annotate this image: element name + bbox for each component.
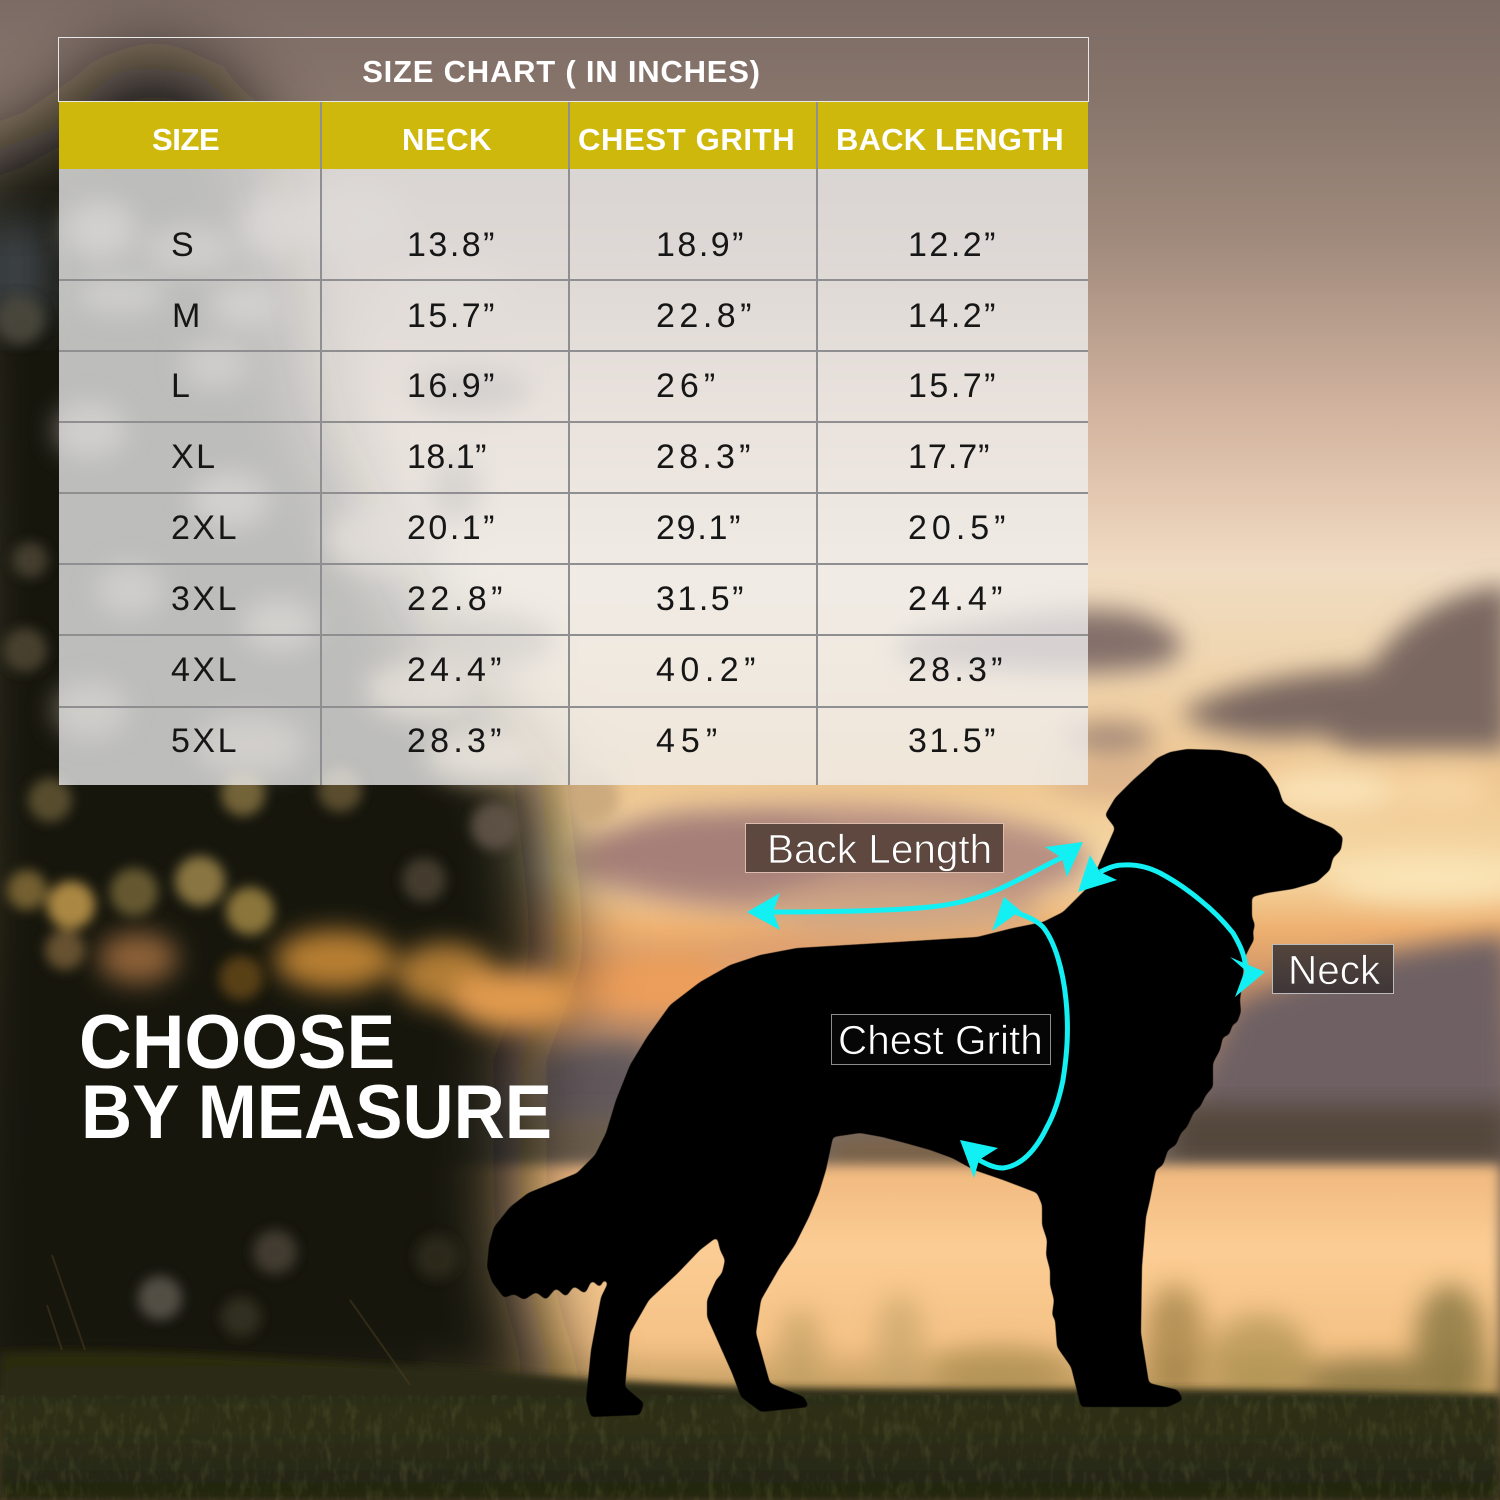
row 2XL: 20.5”: [908, 509, 1010, 547]
arrow: chest girth: [960, 897, 1067, 1178]
label: back length: Back Length: [767, 826, 992, 872]
header row: BACK LENGTH: [836, 122, 1064, 157]
row S: 18.9”: [656, 226, 746, 264]
row XL: 18.1”: [407, 438, 487, 476]
row 2XL: 20.1”: [407, 509, 497, 547]
reeds and grass: [778, 1285, 1485, 1405]
row XL: [171, 438, 990, 476]
size chart table: [58, 37, 1089, 785]
tree mass: [0, 60, 570, 1420]
label: chest girth: Chest Grith: [838, 1017, 1043, 1063]
row 4XL: 40.2”: [656, 651, 761, 689]
row M: 15.7”: [407, 297, 497, 335]
row S: S: [171, 226, 196, 264]
row L: 15.7”: [908, 367, 998, 405]
row M: 22.8”: [656, 297, 756, 335]
label: neck: Neck: [1288, 947, 1380, 993]
tree leaf gaps seen through panel: [52, 182, 555, 780]
header row: SIZE: [152, 122, 219, 157]
arrow: neck: [1078, 855, 1265, 997]
heading: choose by measure: BY MEASURE: [81, 1070, 552, 1155]
row M: M: [172, 297, 203, 335]
row 4XL: 4XL: [171, 651, 239, 689]
row 3XL: [171, 580, 1007, 618]
row 5XL: 31.5”: [908, 722, 998, 760]
heading: choose by measure: CHOOSE: [79, 1000, 395, 1085]
row 5XL: 45”: [656, 722, 723, 760]
row M: 14.2”: [908, 297, 998, 335]
row 2XL: [171, 509, 1010, 547]
row 4XL: 28.3”: [908, 651, 1007, 689]
chart title: SIZE CHART ( IN INCHES): [362, 54, 761, 89]
row 3XL: 3XL: [171, 580, 239, 618]
row S: 13.8”: [407, 226, 497, 264]
row XL: 17.7”: [908, 438, 990, 476]
row 5XL: 5XL: [171, 722, 239, 760]
table body: [59, 169, 1088, 785]
row 5XL: [171, 722, 998, 760]
row S: 12.2”: [908, 226, 998, 264]
header row: [59, 102, 1088, 169]
row S: [171, 226, 998, 264]
chart title: [58, 37, 1089, 102]
heading: choose by measure: [79, 1000, 552, 1155]
row L: [171, 367, 998, 405]
row M: [172, 297, 998, 335]
row 3XL: 31.5”: [656, 580, 746, 618]
row 5XL: 28.3”: [407, 722, 506, 760]
row XL: XL: [171, 438, 218, 476]
row L: L: [171, 367, 192, 405]
row 2XL: 2XL: [171, 509, 239, 547]
row L: 26”: [656, 367, 720, 405]
row 4XL: 24.4”: [407, 651, 506, 689]
header row: CHEST GRITH: [578, 122, 795, 157]
row XL: 28.3”: [656, 438, 755, 476]
header row: NECK: [402, 122, 492, 157]
row 4XL: [171, 651, 1007, 689]
row 3XL: 22.8”: [407, 580, 507, 618]
bokeh lights: warm band: [98, 930, 580, 1030]
row 2XL: 29.1”: [656, 509, 742, 547]
row L: 16.9”: [407, 367, 497, 405]
arrow: back length: [747, 842, 1083, 930]
label: neck: [1272, 944, 1394, 994]
row 3XL: 24.4”: [908, 580, 1007, 618]
bokeh lights: [0, 296, 619, 1337]
